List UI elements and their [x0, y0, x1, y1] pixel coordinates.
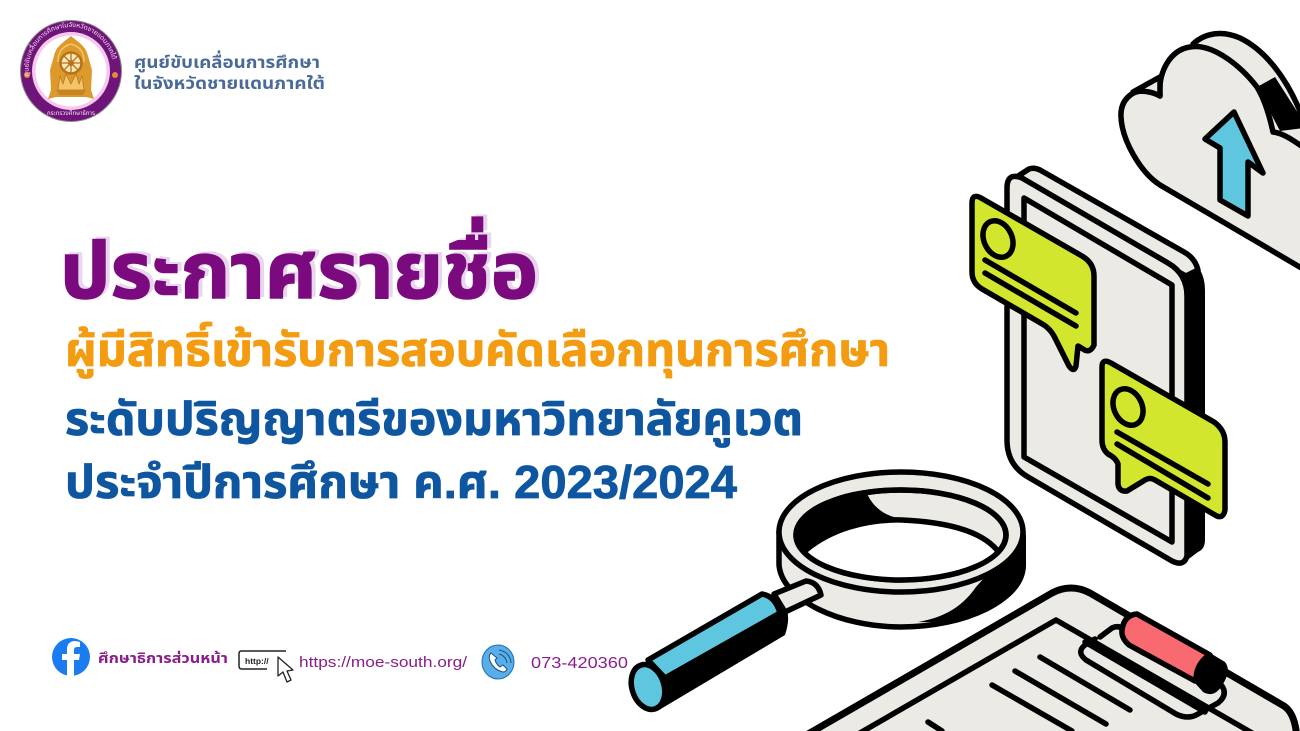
- footer: website: https://moe-south.org/: [299, 654, 468, 671]
- footer: facebook: ศึกษาธิการส่วนหน้า: [98, 650, 228, 666]
- illustration: tablet with chat bubbles: [972, 167, 1225, 564]
- header organisation name: [134, 50, 325, 93]
- title: ประกาศรายชื่อ: [64, 215, 542, 313]
- clip loop: [1081, 627, 1224, 717]
- icon: upload arrow: [1205, 112, 1263, 216]
- magnifier handle: [626, 581, 821, 714]
- document text lines: [928, 657, 1130, 731]
- footer: website: [239, 651, 468, 682]
- icon: phone: [482, 645, 514, 679]
- footer: phone: [482, 645, 628, 679]
- illustration: magnifying glass: [626, 472, 1026, 714]
- icon: facebook: [52, 638, 90, 676]
- red clip: [1122, 614, 1210, 681]
- subtitle line: academic year: ประจำปีการศึกษา ค.ศ. 2023/2024: [65, 456, 737, 508]
- chat bubble lower: [1102, 361, 1225, 517]
- icon: http cursor: [239, 651, 293, 682]
- logo: ministry emblem seal: ศูนย์ขับเคลื่อนการศึกษาในจังหวัดชายแดนภาคใต้: [24, 22, 118, 76]
- subtitle line: orange: ผู้มีสิทธิ์เข้ารับการสอบคัดเลือกทุนการศึกษา: [65, 322, 890, 378]
- subtitle line: degree and university: ระดับปริญญาตรีของมหาวิทยาลัยคูเวต: [65, 393, 803, 447]
- title: ประกาศรายชื่อ: [60, 217, 538, 315]
- logo: ministry emblem seal: กระทรวงศึกษาธิการ: [47, 109, 95, 117]
- illustration: clipboard with document: [796, 588, 1297, 731]
- icon: http cursor: http://: [245, 656, 269, 666]
- illustration: cloud with upload arrow: [1121, 33, 1300, 273]
- header organisation name: ศูนย์ขับเคลื่อนการศึกษา: [134, 50, 320, 73]
- header organisation name: ในจังหวัดชายแดนภาคใต้: [134, 74, 325, 93]
- chat bubble upper: [972, 196, 1094, 370]
- footer: phone: 073-420360: [531, 655, 628, 672]
- footer: facebook: [52, 638, 228, 676]
- logo: ministry emblem seal: [20, 20, 122, 122]
